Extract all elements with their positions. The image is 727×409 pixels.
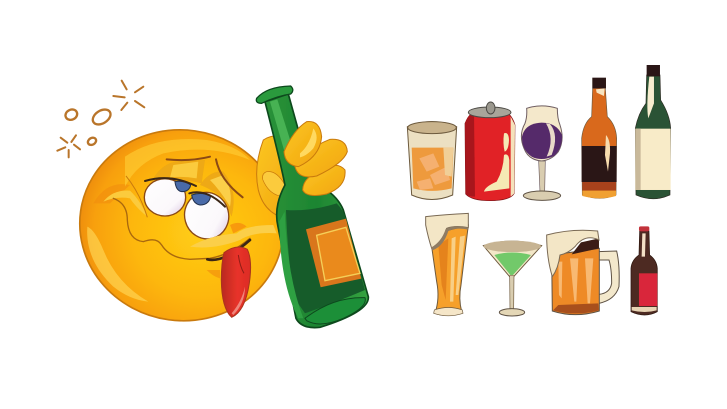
bottle base [305,298,365,324]
icon: whisky glass [407,122,457,199]
bottom row of drinks [426,213,657,316]
icon: dizzy sparkles and bubbles [57,81,144,157]
icon: green wine bottle [635,65,671,199]
icon: martini glass [483,241,542,316]
left cheek fold [103,191,147,217]
icon: fingers [284,122,347,195]
icon: back of hand [257,136,297,217]
icon: face [67,117,296,334]
drunk emoji with bottle [57,81,368,334]
icon: beer pilsner glass [426,213,468,316]
left brow fold and lid [150,160,205,185]
icon: wavy mouth [113,198,250,259]
icon: left eye [144,178,196,216]
bottle label [306,219,361,287]
bottle lip [256,86,293,103]
right cheek fold [190,225,277,247]
icon: tongue [221,247,251,317]
icon: small beer bottle [631,226,657,315]
right lid [200,171,234,217]
top row of drinks [407,65,671,201]
icon: beer mug [547,230,619,315]
icon: amber bottle [582,78,617,198]
icon: green bottle [256,86,368,328]
icon: red can [465,102,515,201]
icon: wine glass [521,106,562,200]
icon: right eye [179,187,234,244]
